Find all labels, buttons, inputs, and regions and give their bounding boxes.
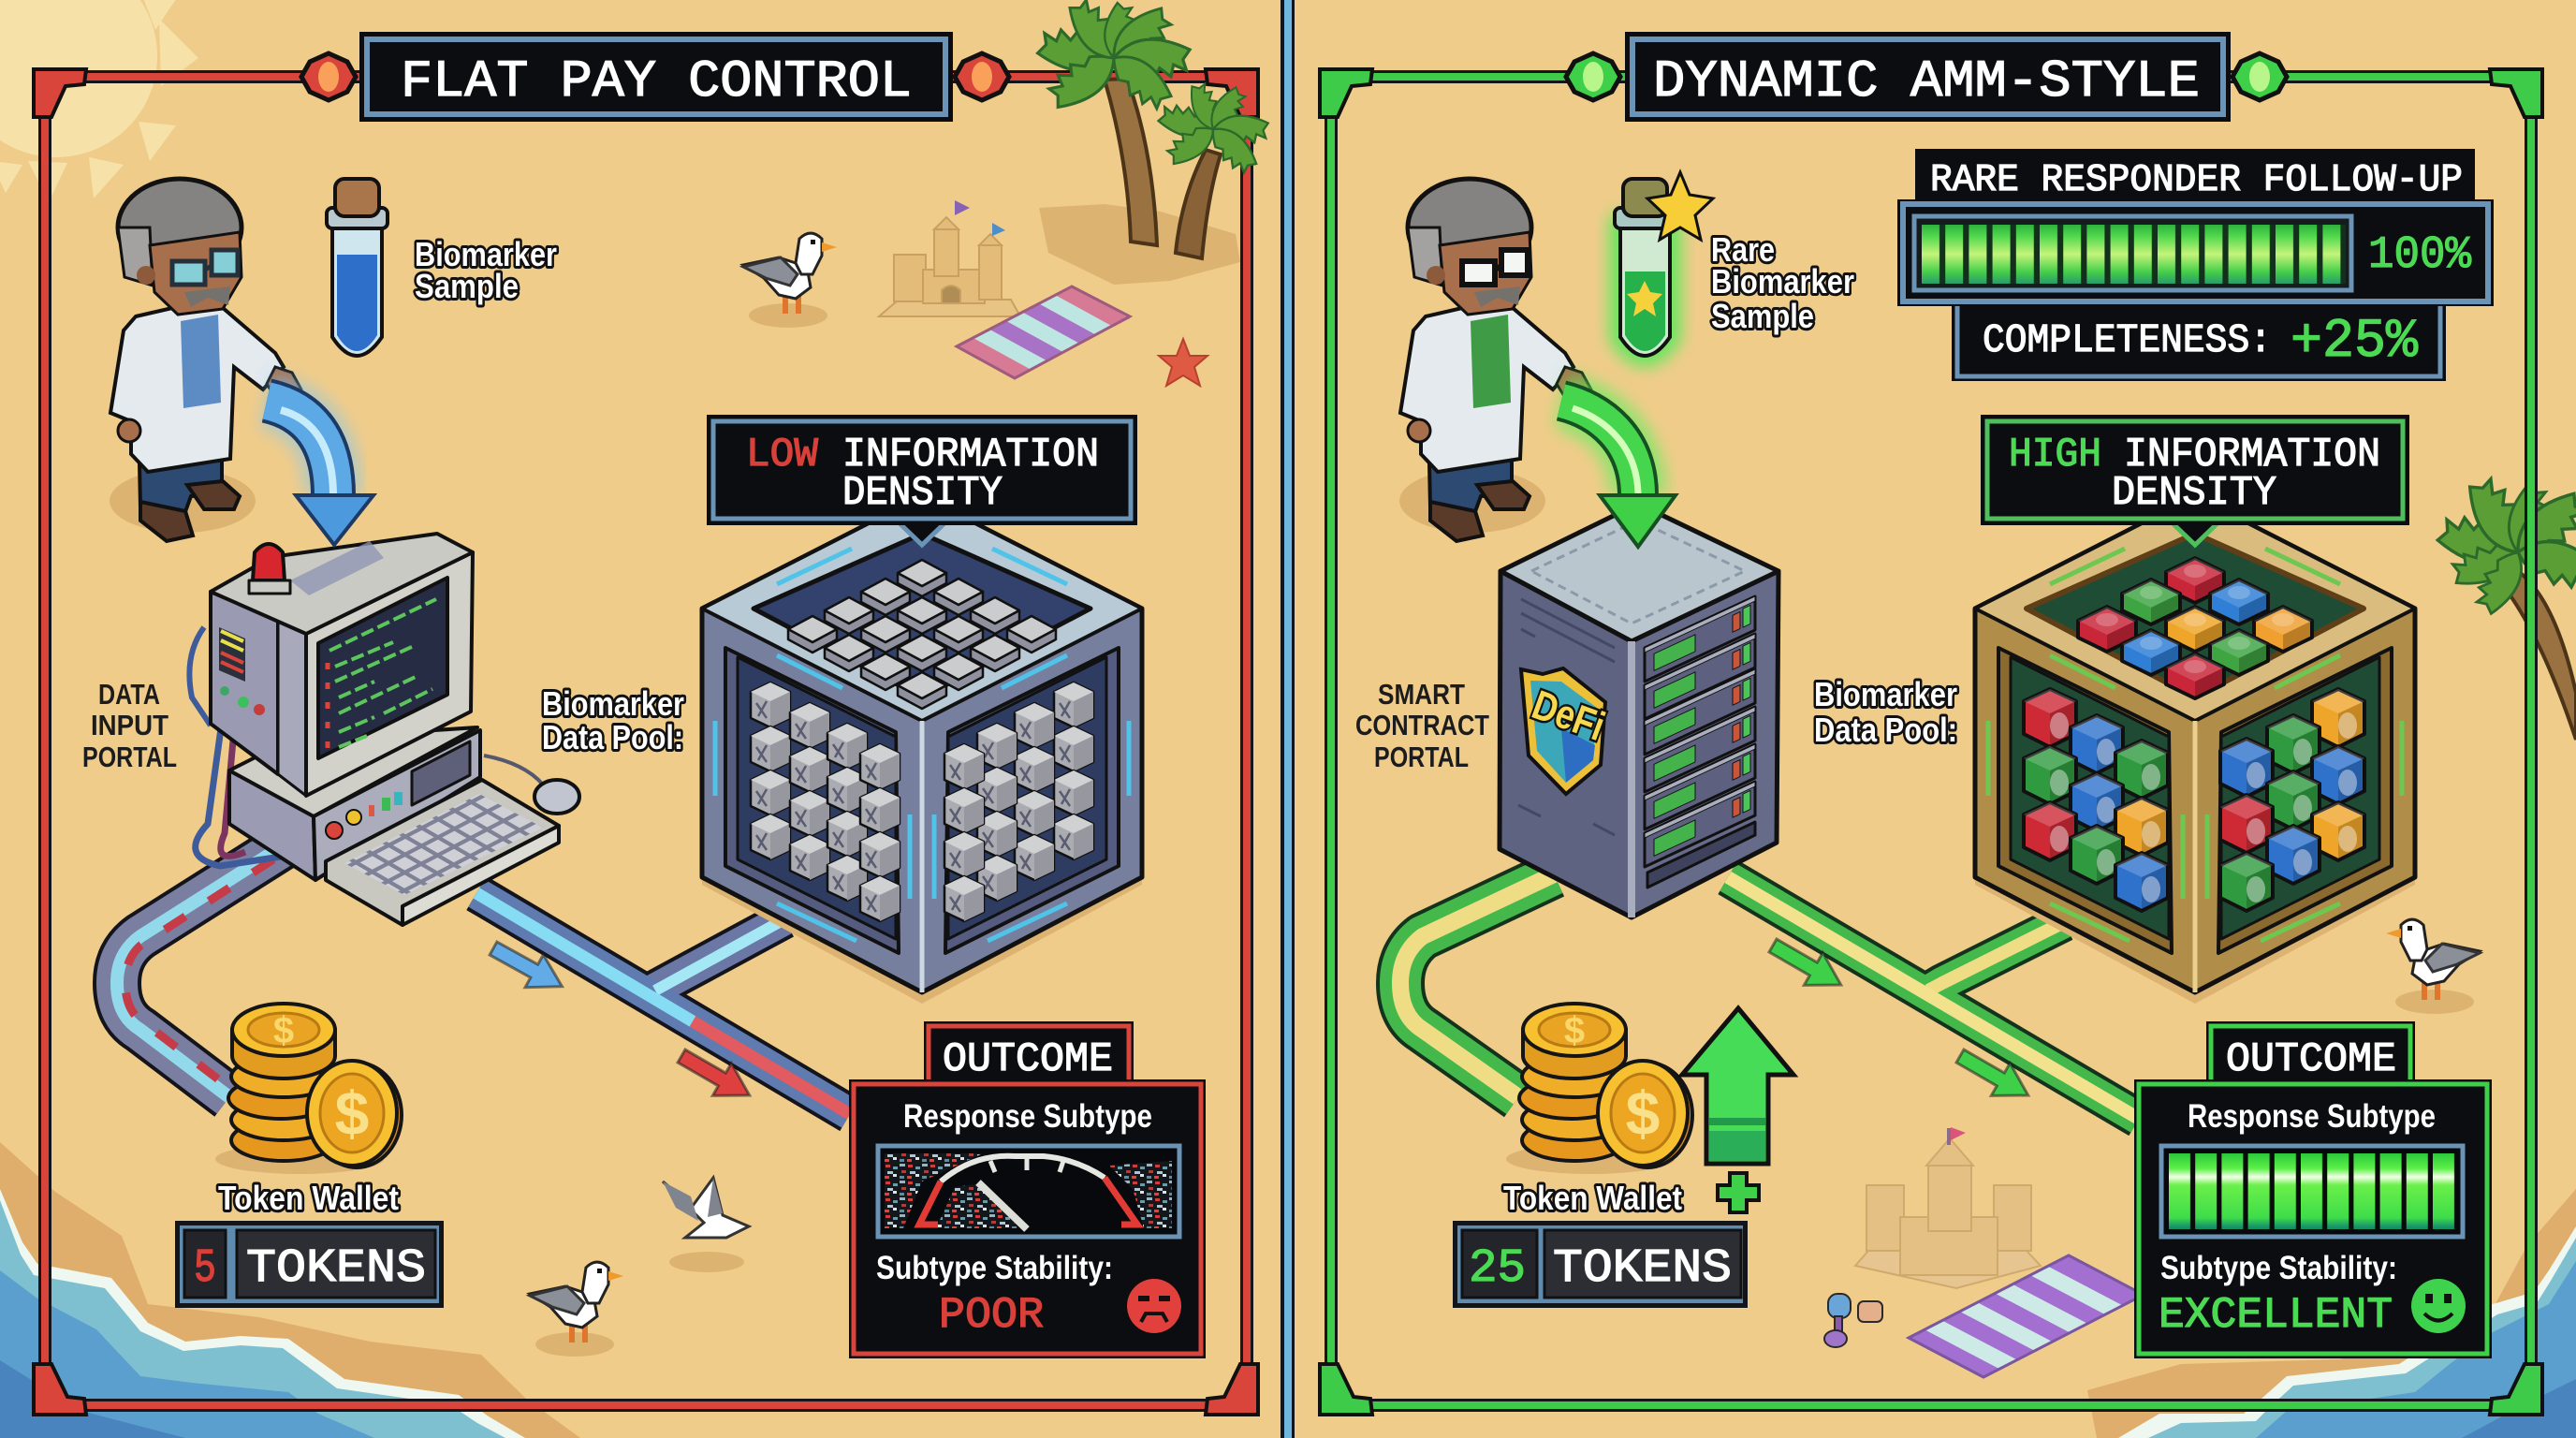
icon: server smart contract portal [1500, 504, 1778, 917]
completeness box [1952, 300, 2446, 381]
icon: coins flat pay [215, 1004, 402, 1174]
completeness box: +25% [2291, 312, 2418, 373]
label: biomarker sample: Biomarker [415, 235, 557, 273]
callout: high information density: HIGH [2009, 432, 2101, 478]
label: data input portal: INPUT [91, 709, 168, 741]
label: token wallet and counter flat pay: Token Wallet [218, 1179, 399, 1217]
icon: computer data input portal [189, 534, 579, 925]
label: biomarker sample: Sample [415, 267, 519, 305]
label: token wallet and counter dynamic: 25 [1469, 1242, 1526, 1296]
icon: happy face [2411, 1279, 2466, 1333]
frame: flat pay red [34, 53, 1258, 1415]
arrow: blue sample flow [267, 401, 373, 545]
coin dollar signs: $ [1564, 1010, 1585, 1051]
sand castle: left [879, 200, 1020, 316]
beach towel: left [957, 286, 1130, 378]
panel: rare responder follow-up [1897, 149, 2494, 381]
frame: dynamic green [1320, 53, 2542, 1415]
label: token wallet and counter dynamic: Token Wallet [1503, 1179, 1682, 1217]
label: biomarker data pool left [542, 684, 684, 756]
icon: defi shield [1521, 668, 1611, 794]
label: token wallet and counter flat pay [175, 1179, 444, 1308]
right face tiles [944, 682, 1093, 921]
icon: sad face [1127, 1279, 1181, 1333]
label: biomarker data pool right: Data Pool: [1814, 711, 1957, 749]
data pipe: dynamic [1400, 874, 2139, 1119]
label: smart contract portal: PORTAL [1374, 741, 1469, 773]
label: rare biomarker sample: Biomarker [1711, 262, 1854, 301]
seagull: top left [743, 233, 837, 328]
panel: outcome dynamic: Response Subtype [2188, 1098, 2436, 1135]
outcome tab: OUTCOME [943, 1036, 1113, 1083]
label: data input portal [82, 678, 177, 773]
icon: coins dynamic [1506, 1004, 1692, 1174]
callout: low information density [707, 415, 1137, 545]
progress bar [1897, 199, 2494, 306]
panel: outcome flat pay: Subtype Stability: [876, 1250, 1113, 1286]
starfish [1159, 339, 1208, 386]
arrow: blue data direction [484, 932, 571, 1003]
callout: low information density: LOW [746, 432, 819, 478]
panel: outcome flat pay [849, 1021, 1206, 1358]
title: dynamic amm-style [1625, 32, 2231, 122]
left face colour tiles [2024, 689, 2168, 911]
cube: low density data pool [702, 496, 1142, 1004]
right face colour tiles [2220, 689, 2364, 911]
icon: sun [0, 0, 198, 202]
arrow: green data direction [1764, 930, 1851, 1001]
progress bar: 100% [2368, 230, 2471, 281]
label: token wallet and counter dynamic [1453, 1179, 1748, 1308]
arrow: green sample flow [1561, 401, 1676, 547]
panel: outcome flat pay: Response Subtype [903, 1098, 1152, 1135]
callout: low information density: INFORMATION [842, 432, 1099, 478]
icon: test tube green [1615, 172, 1713, 356]
icon: scientist dynamic [1399, 179, 1591, 541]
seagull: bottom [530, 1262, 623, 1357]
label: token wallet and counter flat pay: TOKENS [246, 1242, 426, 1296]
left face tiles [751, 682, 900, 921]
divider [1281, 0, 1295, 1438]
title: flat pay control: FLAT PAY CONTROL [401, 51, 912, 111]
label: biomarker data pool right [1814, 675, 1957, 749]
icon: test tube blue [327, 179, 388, 356]
label: data input portal: PORTAL [82, 741, 177, 773]
beach towel: right [1909, 1255, 2144, 1377]
sand castle: right [1855, 1127, 2041, 1288]
outcome tab [2206, 1021, 2415, 1089]
title: dynamic amm-style: DYNAMIC AMM-STYLE [1653, 51, 2200, 111]
label: biomarker sample [415, 235, 557, 305]
heading tab: RARE RESPONDER FOLLOW-UP [1930, 159, 2463, 202]
callout: high information density: DENSITY [2112, 470, 2276, 517]
arrow: green outcome direction [1951, 1040, 2038, 1111]
icon: coins dynamic: $ [1626, 1078, 1660, 1148]
completeness box: COMPLETENESS: [1983, 317, 2272, 363]
label: biomarker data pool left: Biomarker [542, 684, 684, 723]
label: smart contract portal: SMART [1378, 678, 1465, 711]
callout: low information density: DENSITY [842, 470, 1003, 517]
coin dollar signs: $ [273, 1010, 294, 1051]
label: smart contract portal [1355, 678, 1489, 773]
shield text: DeFi [1527, 682, 1611, 750]
cube: high density data pool [1975, 496, 2415, 1004]
panel: outcome dynamic [2134, 1021, 2492, 1358]
callout: high information density [1981, 415, 2409, 545]
label: token wallet and counter flat pay: 5 [194, 1242, 216, 1296]
seagull: flying [663, 1178, 749, 1272]
outcome tab [924, 1021, 1134, 1089]
label: rare biomarker sample: Sample [1711, 297, 1814, 335]
ocean: bottom right [2087, 1189, 2576, 1438]
arrow: red outcome direction [672, 1040, 759, 1111]
label: biomarker data pool right: Biomarker [1814, 675, 1957, 713]
panel: outcome dynamic: Subtype Stability: [2160, 1250, 2397, 1286]
label: rare biomarker sample: Rare [1711, 230, 1775, 269]
top tiles [788, 560, 1056, 709]
palm trees: left scene [1036, 0, 1268, 285]
palm: right side [2436, 473, 2576, 740]
icon: big green up arrow [1682, 1008, 1793, 1164]
title: flat pay control [359, 32, 953, 122]
sand toys [1824, 1294, 1882, 1347]
label: data input portal: DATA [98, 678, 160, 711]
label: token wallet and counter dynamic: TOKENS [1553, 1242, 1732, 1296]
ocean: bottom left [0, 1142, 580, 1438]
stability bar [2161, 1146, 2463, 1237]
label: smart contract portal: CONTRACT [1355, 709, 1489, 741]
top colour tiles [2078, 558, 2312, 698]
icon: coins flat pay: $ [335, 1078, 369, 1148]
icon: plus [1718, 1173, 1759, 1212]
seagull: right [2386, 919, 2480, 1014]
panel: outcome dynamic: EXCELLENT [2159, 1291, 2393, 1340]
callout: high information density: INFORMATION [2124, 432, 2380, 478]
panel: outcome flat pay: POOR [939, 1291, 1044, 1340]
data pipe: flat pay [117, 847, 850, 1114]
label: rare biomarker sample [1711, 230, 1854, 335]
gauge [878, 1146, 1179, 1237]
label: biomarker data pool left: Data Pool: [542, 718, 683, 756]
outcome tab: OUTCOME [2226, 1036, 2396, 1083]
icon: scientist flat pay [110, 179, 301, 541]
